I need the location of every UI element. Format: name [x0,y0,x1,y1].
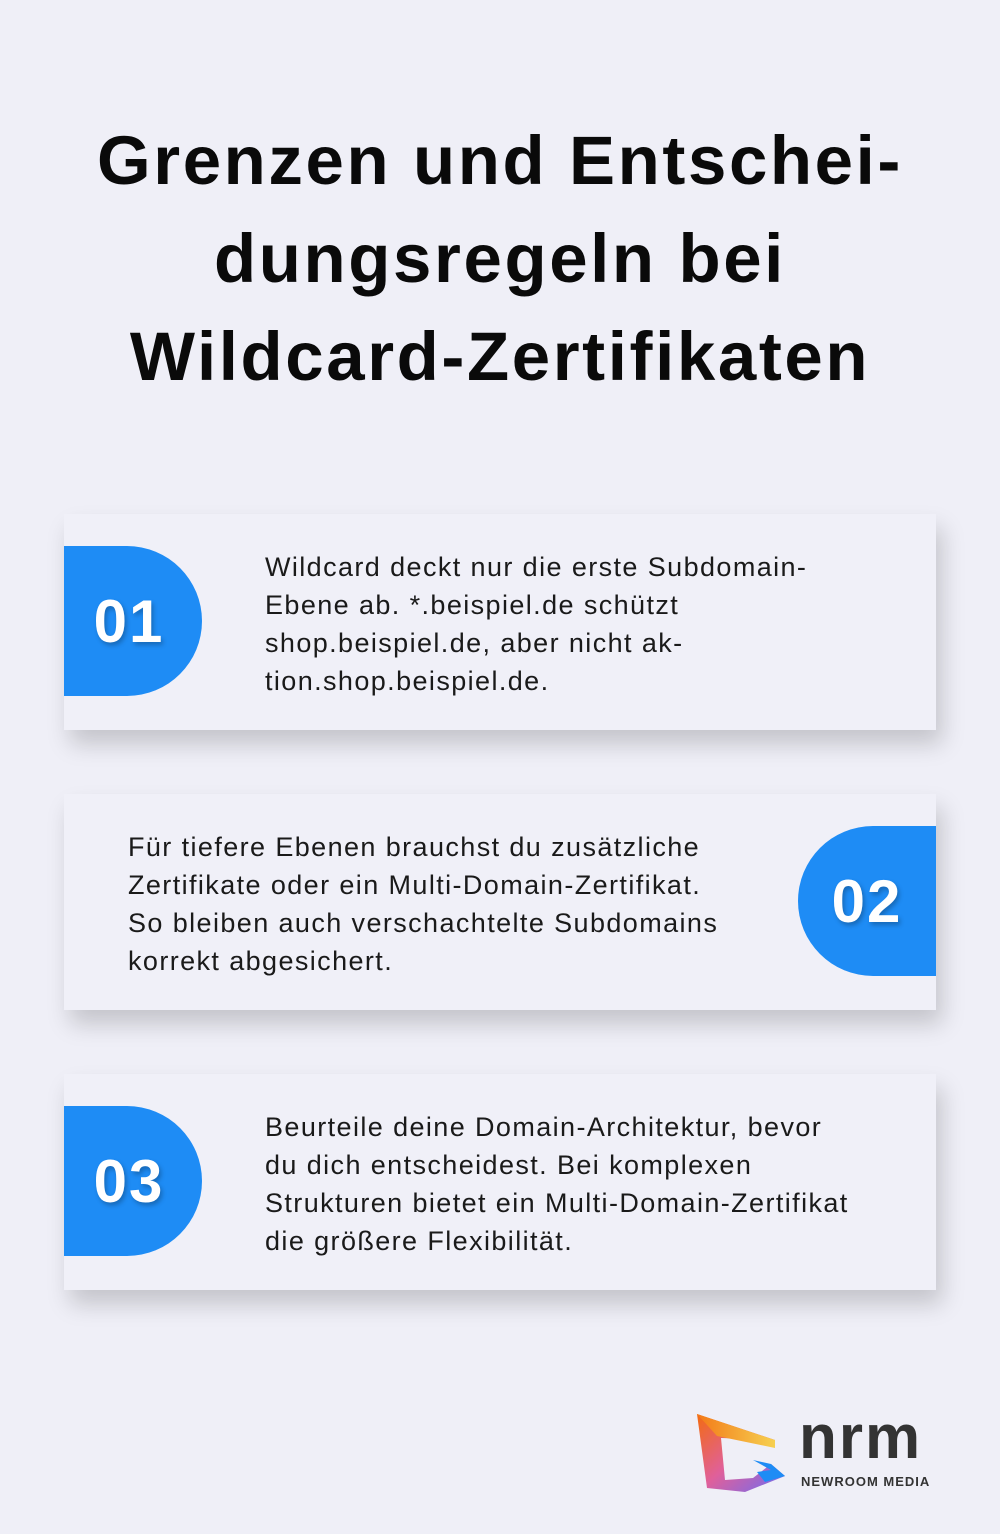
text 03 [265,1112,849,1256]
panel: step 03 [64,1074,936,1290]
logo text: nrm [799,1403,922,1472]
badge 02 [798,826,936,976]
badge 03 [64,1106,202,1256]
text 03: Beurteile deine Domain-Architektur, bevor [265,1112,822,1142]
title: Grenzen und Entschei- [97,122,903,199]
badge 01 [64,546,202,696]
text 01: Wildcard deckt nur die erste Subdomain- [265,552,807,582]
panel: step 02 [64,794,936,1010]
text 02: Zertifikate oder ein Multi-Domain-Zertifikat. [128,870,701,900]
badge 02: 02 [832,868,902,934]
text 01: tion.shop.beispiel.de. [265,666,549,696]
title: Wildcard-Zertifikaten [130,318,870,395]
text 02: So bleiben auch verschachtelte Subdomains [128,908,718,938]
badge 01: 01 [94,588,164,654]
icon: logo mark [697,1414,785,1492]
title: dungsregeln bei [214,220,786,297]
text 03: du dich entscheidest. Bei komplexen [265,1150,752,1180]
text 01: shop.beispiel.de, aber nicht ak- [265,628,684,658]
text 02: Für tiefere Ebenen brauchst du zusätzliche [128,832,700,862]
logo [697,1403,930,1492]
logo: NEWROOM MEDIA [801,1474,930,1489]
badge 03: 03 [94,1148,164,1214]
text 02 [128,832,718,976]
title [97,122,903,395]
text 01 [265,552,807,696]
text 03: Strukturen bietet ein Multi-Domain-Zertifikat [265,1188,849,1218]
text 03: die größere Flexibilität. [265,1226,573,1256]
text 01: Ebene ab. *.beispiel.de schützt [265,590,679,620]
panel: step 01 [64,514,936,730]
text 02: korrekt abgesichert. [128,946,393,976]
